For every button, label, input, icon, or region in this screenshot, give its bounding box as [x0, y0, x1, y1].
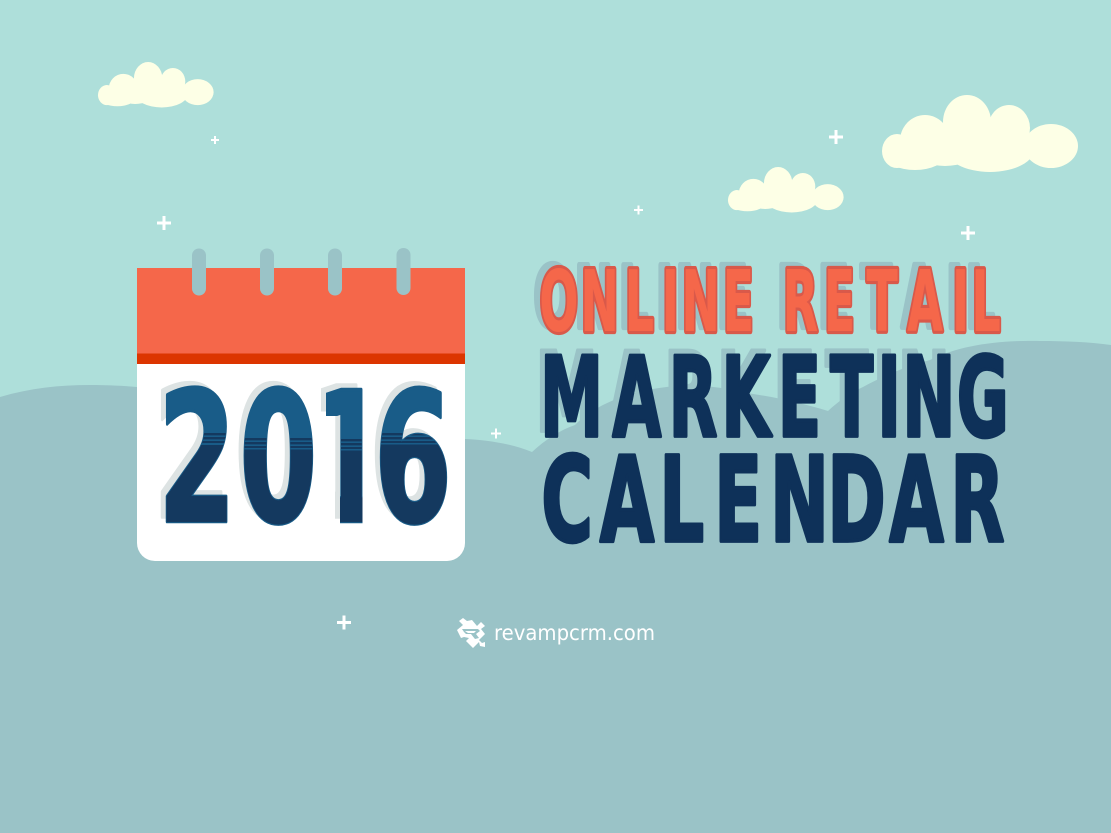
heading: online retail: ONLINE RETAIL	[539, 254, 1001, 352]
year 2016: 2016	[158, 353, 452, 565]
heading: calendar: CALENDAR	[541, 432, 1005, 569]
heading: marketing: MARKETING	[540, 334, 1009, 463]
calendar	[137, 248, 465, 565]
sparkles	[157, 130, 975, 630]
cloud: centre small	[728, 167, 844, 212]
year 2016: 2016	[158, 353, 452, 565]
heading: marketing: MARKETING	[535, 329, 1004, 458]
year 2016: 2016	[153, 349, 447, 560]
icon: revamp logo	[457, 618, 485, 648]
background hills	[0, 341, 1111, 833]
logo and website	[457, 618, 655, 648]
calendar rings	[192, 248, 410, 296]
calendar header band	[137, 354, 465, 364]
heading: online retail: ONLINE RETAIL	[533, 250, 995, 348]
cloud: top left	[98, 62, 214, 107]
website: revampcrm.com	[494, 621, 655, 646]
year 2016	[160, 381, 448, 526]
calendar header	[137, 268, 465, 354]
cloud: top right large	[882, 95, 1078, 172]
calendar page	[137, 360, 465, 561]
